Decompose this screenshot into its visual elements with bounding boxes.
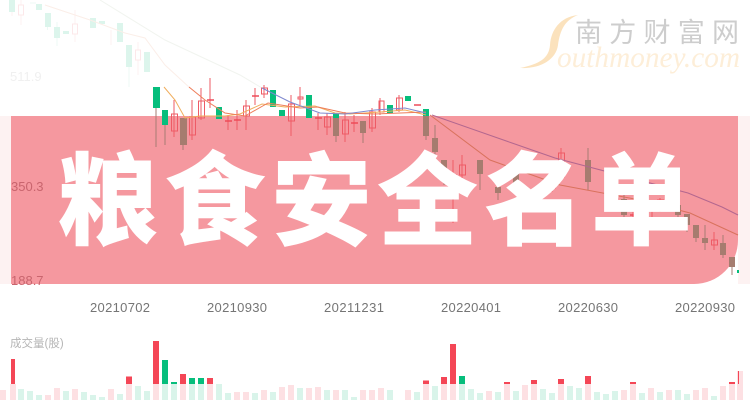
brown wicks <box>156 108 732 275</box>
logo latin name: outhmoney.com <box>557 41 740 74</box>
title: 粮 <box>57 147 158 259</box>
volume bars <box>0 341 743 400</box>
faded green volume bars <box>18 384 717 400</box>
title: 单 <box>591 147 692 259</box>
axis value labels: 188.7 <box>11 273 44 288</box>
volume label: 成交量(股) <box>10 336 64 350</box>
axis value labels <box>10 69 44 288</box>
strong red volume bars <box>11 341 739 384</box>
candlestick chart <box>153 78 739 275</box>
faded candlesticks above the banner <box>9 0 150 87</box>
title: 安 <box>271 147 372 259</box>
date axis labels: 20210702 <box>90 300 150 315</box>
date axis labels: 20220930 <box>675 300 735 315</box>
red doji marks <box>207 96 656 222</box>
logo: southmoney <box>520 15 740 74</box>
hollow red candles <box>172 88 718 245</box>
date axis labels: 20220401 <box>441 300 501 315</box>
red wicks <box>174 78 714 250</box>
title <box>57 147 692 259</box>
faded moving average lines <box>45 0 262 88</box>
side tint strips <box>0 116 750 284</box>
green bodies <box>153 87 739 273</box>
title: 食 <box>164 147 266 259</box>
title: 名 <box>484 147 585 259</box>
axis value labels: 511.9 <box>10 69 42 84</box>
date axis labels <box>90 300 735 315</box>
pink banner panel <box>11 116 738 284</box>
logo chinese name: 南方财富网 <box>575 18 739 48</box>
moving average lines <box>164 87 738 235</box>
logo swoosh <box>520 15 578 68</box>
title: 全 <box>377 147 478 259</box>
strong green volume bars <box>162 360 465 384</box>
date axis labels: 20220630 <box>558 300 618 315</box>
axis value labels: 350.3 <box>11 179 44 194</box>
date axis labels: 20211231 <box>324 300 384 315</box>
faded red volume bars <box>0 371 743 400</box>
brown bodies <box>162 113 735 267</box>
date axis labels: 20210930 <box>207 300 267 315</box>
